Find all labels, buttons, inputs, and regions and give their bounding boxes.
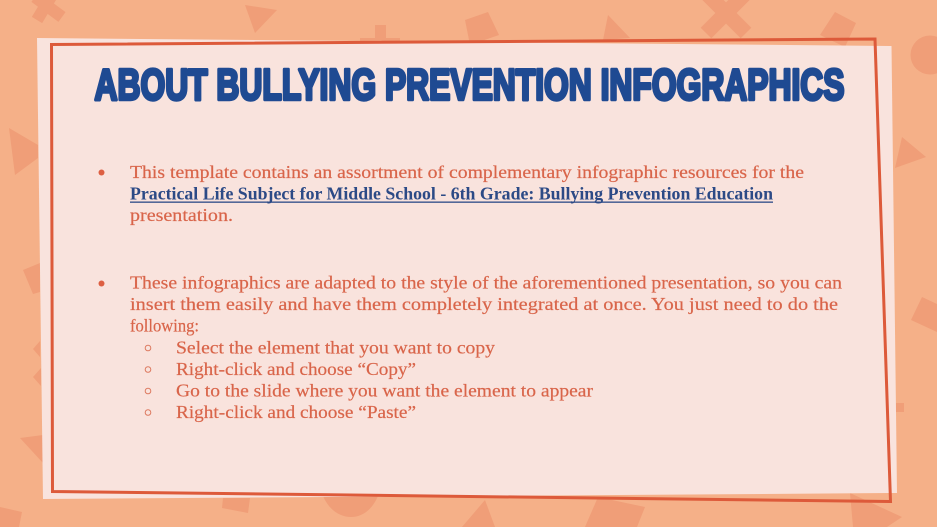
list: copy and paste steps: Right-click and choose “Paste” (176, 402, 416, 422)
text block: first bullet: presentation. (130, 205, 233, 225)
text block: second bullet (98, 272, 842, 336)
text block: second bullet: following: (130, 316, 199, 336)
text block: second bullet: insert them easily and have them completely integrated at once. You just need to do the (130, 294, 838, 314)
icon: bullet dot (98, 170, 104, 176)
list: copy and paste steps (145, 338, 593, 422)
list: copy and paste steps: Right-click and choose “Copy” (176, 359, 416, 379)
list: copy and paste steps: Select the element that you want to copy (176, 338, 495, 358)
text block: second bullet: These infographics are adapted to the style of the aforementioned presentation, so you can (130, 272, 842, 292)
panel: red frame (52, 39, 890, 502)
text block: first bullet: This template contains an assortment of complementary infographic resources for the (130, 162, 804, 182)
icon: bullet dot (98, 280, 104, 286)
text block: first bullet: Practical Life Subject for Middle School - 6th Grade: Bullying Prevention Education (130, 184, 773, 204)
text block: first bullet (98, 162, 804, 225)
list: copy and paste steps: Go to the slide where you want the element to appear (176, 380, 593, 400)
